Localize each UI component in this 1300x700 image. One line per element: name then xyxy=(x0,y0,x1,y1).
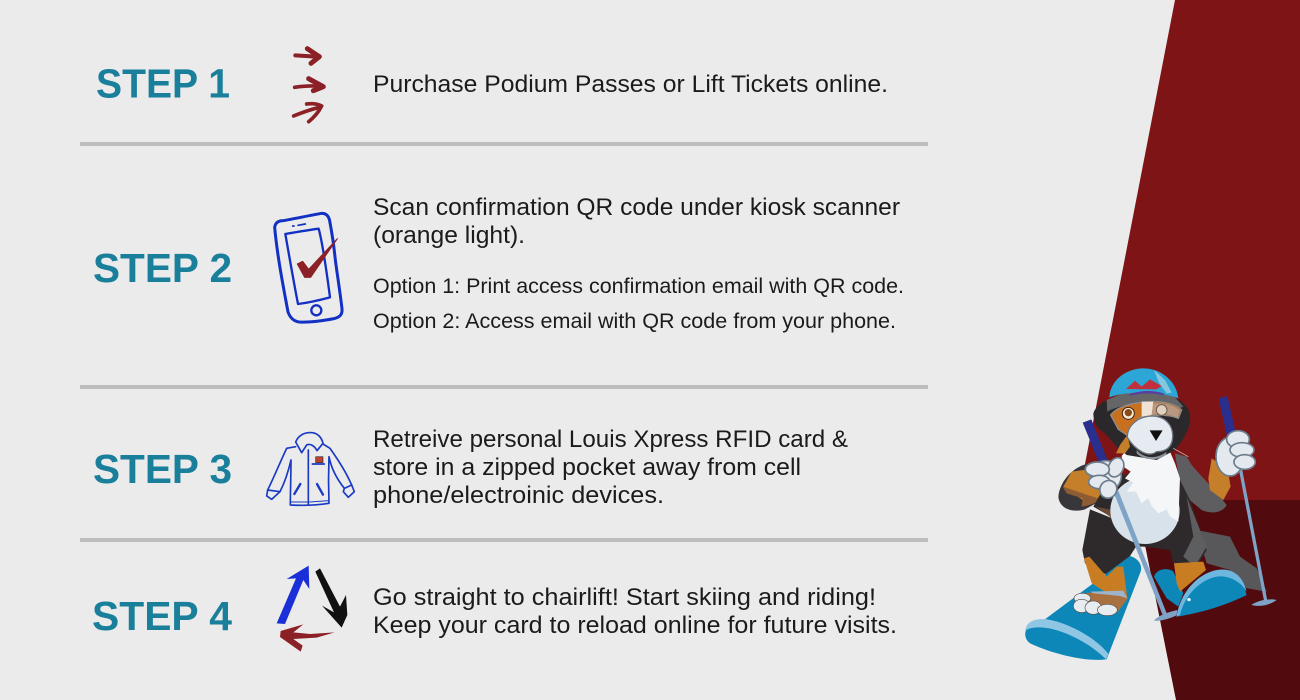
icon: phone with check mark xyxy=(275,213,342,322)
back ski and leg xyxy=(1154,562,1247,617)
belly and chest xyxy=(1110,450,1180,544)
left glove xyxy=(1085,455,1127,501)
heading: step 3: STEP 3 xyxy=(93,446,232,492)
text: step 2 instructions: Scan confirmation QR code under kiosk scanner xyxy=(373,194,900,221)
text: step 4 instructions: Keep your card to reload online for future visits. xyxy=(373,612,897,639)
muzzle xyxy=(1127,416,1173,454)
text: step 3 instructions: phone/electroinic devices. xyxy=(373,482,664,509)
text: step 4 instructions: Go straight to chairlift! Start skiing and riding! xyxy=(373,584,876,611)
back pole xyxy=(1219,396,1277,606)
back leg xyxy=(1197,530,1267,592)
text: step 2 instructions: (orange light). xyxy=(373,222,525,249)
right arm xyxy=(1175,453,1227,512)
body xyxy=(1093,467,1207,567)
icon: three red arrows xyxy=(294,49,323,122)
heading: step 1: STEP 1 xyxy=(96,60,230,106)
text: step 2 instructions: Option 2: Access email with QR code from your phone. xyxy=(373,310,896,333)
icon: jacket xyxy=(267,433,354,505)
front leg xyxy=(1084,557,1127,598)
left arm xyxy=(1058,460,1112,511)
icon: cycle arrows xyxy=(277,566,347,652)
head xyxy=(1093,392,1190,460)
text: step 3 instructions: store in a zipped pocket away from cell xyxy=(373,454,801,481)
right glove xyxy=(1216,431,1255,476)
heading: step 4: STEP 4 xyxy=(92,593,232,639)
text: step 2 instructions: Option 1: Print access confirmation email with QR code. xyxy=(373,275,904,298)
text: step 1 instruction: Purchase Podium Passes or Lift Tickets online. xyxy=(373,71,888,98)
helmet xyxy=(1109,368,1178,398)
front ski xyxy=(1025,556,1141,660)
text: step 3 instructions: Retreive personal Louis Xpress RFID card & xyxy=(373,426,848,453)
illustration: skiing dog mascot xyxy=(1025,368,1277,660)
heading: step 2: STEP 2 xyxy=(93,245,232,291)
front paw xyxy=(1073,591,1128,616)
text: step 3 instructions xyxy=(373,426,848,509)
text: step 2 instructions xyxy=(373,194,904,333)
text: step 4 instructions xyxy=(373,584,897,639)
front pole xyxy=(1083,419,1177,621)
panel: red background xyxy=(1078,0,1300,700)
goggles xyxy=(1111,402,1182,435)
